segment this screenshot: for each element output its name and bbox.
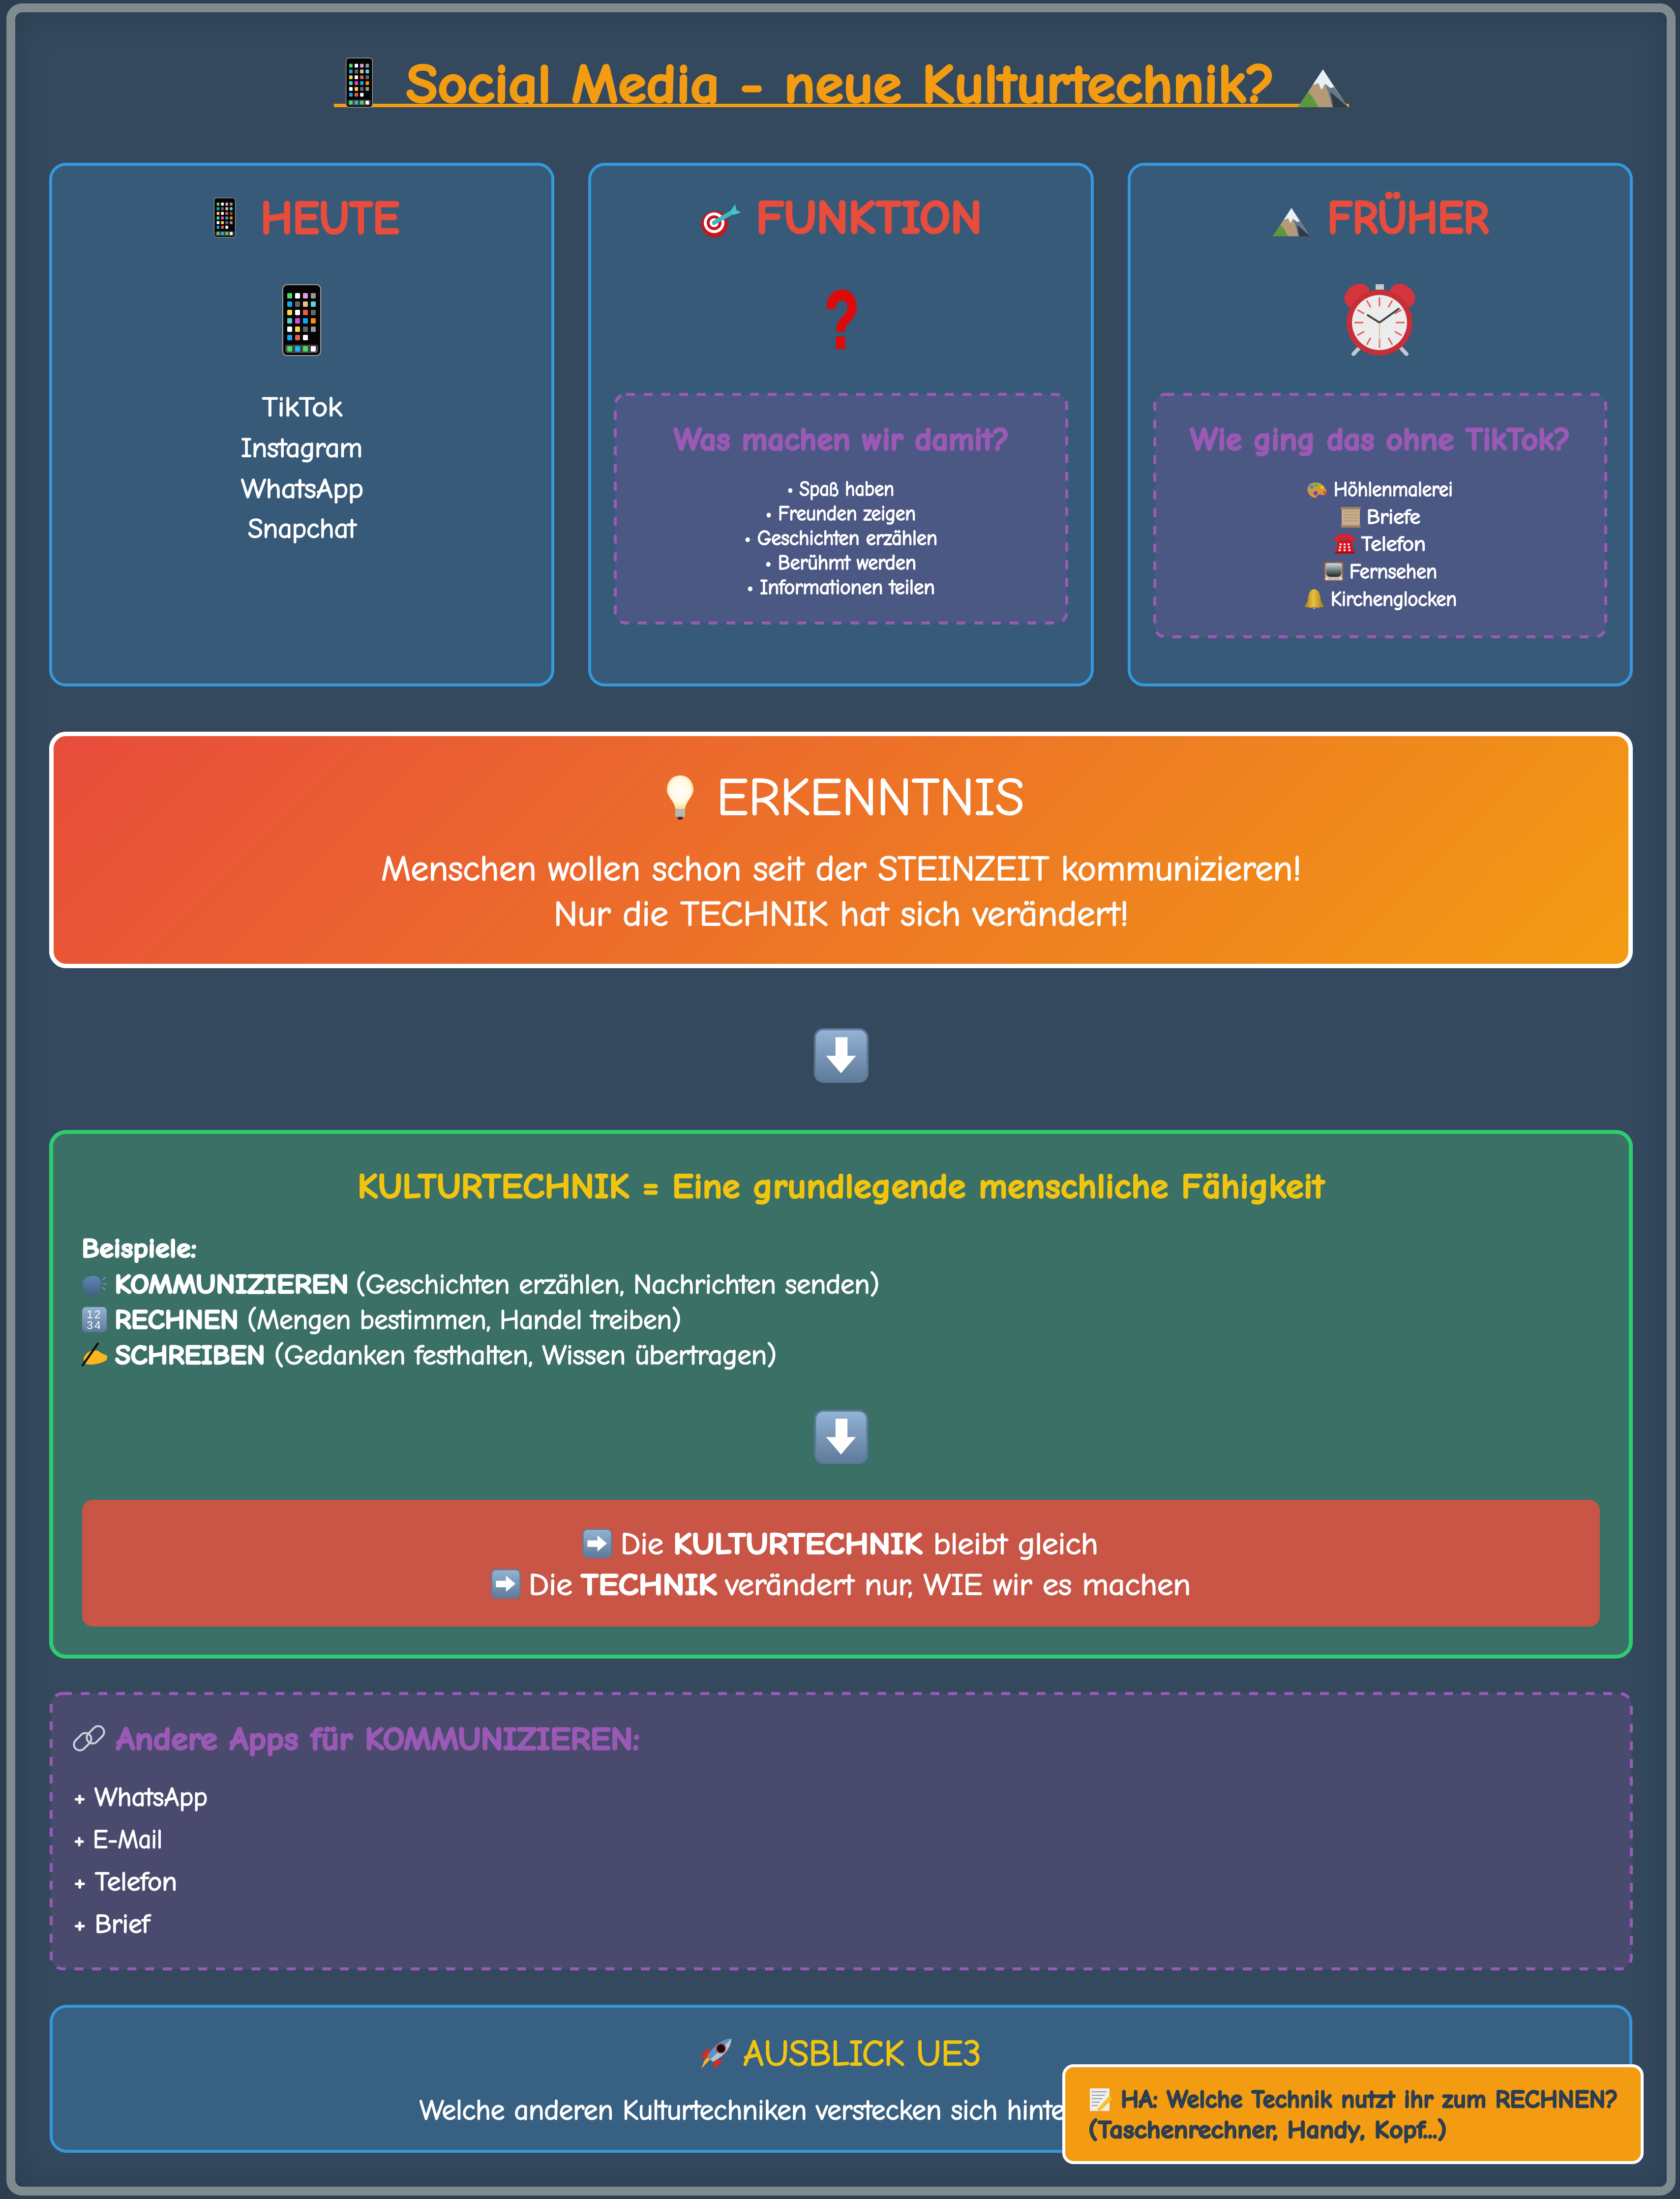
callout: was machen wir damit: • Berühmt werden — [765, 551, 916, 575]
callout: was machen wir damit: • Geschichten erzählen — [745, 526, 937, 550]
text block: Menschen wollen schon seit der STEINZEIT kommunizieren! — [381, 848, 1301, 889]
icon: target with dart — [701, 204, 741, 238]
callout: wie ging das ohne tiktok: Briefe — [1367, 505, 1420, 529]
panel: heute — [51, 164, 553, 685]
text block: Nur die TECHNIK hat sich verändert! — [554, 893, 1129, 934]
text: beispiele: Beispiele: — [82, 1233, 197, 1264]
icon: right arrow — [583, 1529, 611, 1558]
app list: + WhatsApp — [74, 1782, 208, 1813]
callout: was machen wir damit: • Freunden zeigen — [766, 502, 916, 526]
callout: wie ging das ohne tiktok: Wie ging das ohne TikTok? — [1190, 421, 1570, 458]
heading: heute: HEUTE — [261, 191, 399, 245]
heading: frueher: FRÜHER — [1327, 191, 1489, 245]
app list — [241, 391, 363, 544]
arrow: down — [815, 1029, 868, 1082]
app list — [74, 1782, 208, 1939]
callout: was machen wir damit: • Spaß haben — [787, 477, 894, 501]
icon: phone — [346, 58, 372, 107]
callout: hausaufgabe: HA: Welche Technik nutzt ihr zum RECHNEN? — [1121, 2084, 1618, 2114]
callout: technik: verändert nur, WIE wir es machen — [725, 1567, 1191, 1603]
callout: was machen wir damit: Was machen wir damit? — [674, 421, 1009, 458]
row: kommunizieren: (Geschichten erzählen, Nachrichten senden) — [356, 1269, 879, 1300]
app list: + E-Mail — [74, 1824, 162, 1855]
callout: technik: TECHNIK — [581, 1567, 717, 1603]
callout: technik: Die — [529, 1567, 572, 1603]
icon: link — [71, 1724, 107, 1753]
icon: writing hand — [82, 1343, 107, 1366]
row: schreiben: SCHREIBEN — [115, 1339, 265, 1371]
panel: funktion — [590, 164, 1092, 685]
icon: television — [1324, 562, 1344, 581]
icon: right arrow — [492, 1570, 520, 1598]
app list: Instagram — [241, 432, 362, 464]
icon: number tile — [82, 1307, 107, 1332]
heading: ausblick: AUSBLICK UE3 — [743, 2032, 981, 2075]
panel: andere apps — [51, 1694, 1631, 1969]
icon: mountain — [1298, 69, 1348, 107]
callout: wie ging das ohne tiktok: Telefon — [1361, 532, 1426, 556]
row: kommunizieren: KOMMUNIZIEREN — [115, 1269, 349, 1300]
callout: hausaufgabe: (Taschenrechner, Handy, Kopf...) — [1088, 2115, 1447, 2144]
panel: ausblick — [51, 2006, 1631, 2151]
callout: technik: bleibt gleich — [933, 1526, 1098, 1562]
app list: + Telefon — [74, 1866, 177, 1897]
panel: frueher — [1129, 164, 1631, 685]
icon: light bulb — [667, 775, 693, 820]
heading: andere apps: Andere Apps für KOMMUNIZIEREN: — [116, 1721, 640, 1758]
text block — [381, 848, 1301, 934]
icon: memo — [1090, 2088, 1112, 2111]
callout: wie ging das ohne tiktok: Höhlenmalerei — [1334, 477, 1453, 502]
row: schreiben: (Gedanken festhalten, Wissen übertragen) — [274, 1339, 777, 1371]
icon: scroll — [1341, 507, 1361, 528]
icon: question mark: ? — [824, 273, 859, 366]
text: ausblick question: Welche anderen Kulturtechniken verstecken sich hinter unseren Apps? — [420, 2094, 1262, 2127]
heading: funktion: FUNKTION — [756, 191, 982, 245]
icon: alarm clock — [1340, 279, 1420, 356]
heading: kulturtechnik: KULTURTECHNIK = Eine grundlegende menschliche Fähigkeit — [358, 1166, 1325, 1207]
icon: number tile: 12 — [87, 1308, 102, 1321]
panel: erkenntnis — [51, 734, 1631, 966]
callout: technik — [82, 1500, 1600, 1627]
icon: phone large — [283, 285, 321, 356]
app list: WhatsApp — [241, 473, 363, 505]
icon: number tile: 34 — [87, 1319, 102, 1332]
callout: was machen wir damit: • Informationen teilen — [747, 575, 935, 599]
panel: kulturtechnik — [51, 1132, 1631, 1657]
callout: hausaufgabe — [1064, 2066, 1642, 2163]
callout: wie ging das ohne tiktok — [1155, 394, 1606, 637]
callout: was machen wir damit — [615, 394, 1067, 623]
heading: erkenntnis: ERKENNTNIS — [717, 767, 1024, 828]
app list: + Brief — [74, 1908, 151, 1939]
callout: wie ging das ohne tiktok: Kirchenglocken — [1331, 587, 1457, 611]
callout: wie ging das ohne tiktok: Fernsehen — [1350, 560, 1437, 584]
callout: technik: KULTURTECHNIK — [673, 1526, 923, 1562]
icon: mountain — [1273, 208, 1310, 237]
icon: bell — [1304, 589, 1324, 609]
icon: speaking head — [83, 1276, 107, 1296]
app list: Snapchat — [248, 513, 357, 544]
row: kommunizieren — [115, 1269, 879, 1300]
icon: phone small — [214, 198, 235, 237]
app list: TikTok — [262, 391, 342, 423]
row: rechnen: (Mengen bestimmen, Handel treiben) — [247, 1304, 681, 1336]
row: rechnen: RECHNEN — [115, 1304, 239, 1336]
callout: technik: Die — [621, 1526, 663, 1562]
title: Social Media - neue Kulturtechnik? — [406, 53, 1275, 116]
icon: palette — [1308, 482, 1327, 498]
icon: rocket — [700, 2039, 731, 2069]
icon: red telephone — [1334, 534, 1355, 554]
arrow: down — [815, 1411, 867, 1463]
